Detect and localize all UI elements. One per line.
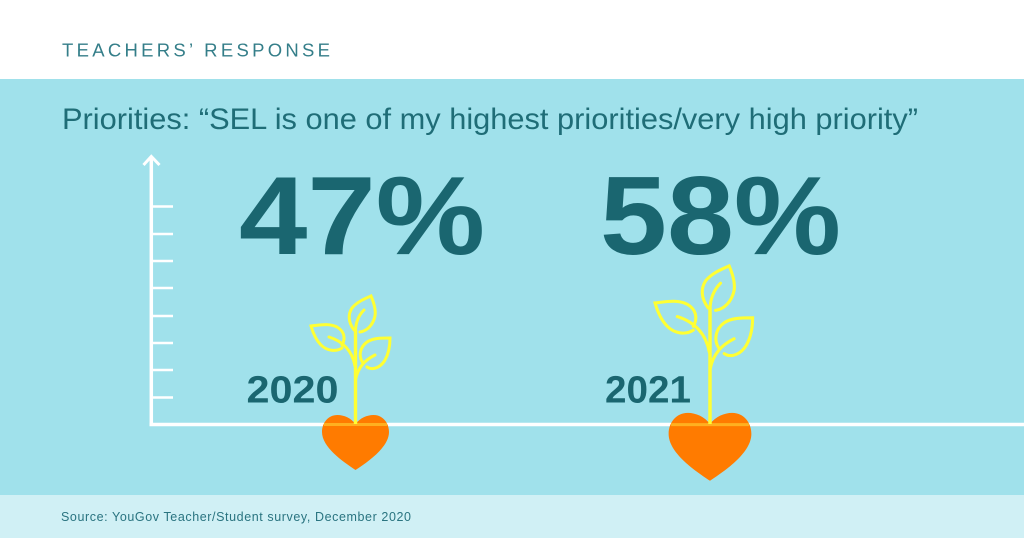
panel: header band (0, 0, 1024, 79)
subheading: priorities: Priorities: “SEL is one of my highest priorities/very high priority” (62, 103, 918, 136)
label: 2020: 2020 (246, 370, 338, 412)
icon: 2020 plant with heart (311, 296, 390, 470)
seedling (311, 296, 390, 424)
chart: axes with ticks (144, 156, 1024, 426)
source note: Source: YouGov Teacher/Student survey, December 2020 (61, 510, 411, 524)
panel: footer band (0, 495, 1024, 538)
seedling (655, 266, 753, 424)
heart (322, 415, 389, 470)
icon: 2021 plant with heart (655, 266, 753, 481)
statistic: 58%: 58% (600, 154, 841, 278)
axis highlight over heart (324, 423, 387, 426)
heart (669, 413, 751, 481)
label: 2021: 2021 (605, 370, 691, 412)
heading: teachers' response: TEACHERS’ RESPONSE (62, 40, 330, 60)
panel: main background (0, 79, 1024, 495)
statistic: 47%: 47% (239, 154, 485, 278)
axis highlight over heart (671, 423, 749, 426)
